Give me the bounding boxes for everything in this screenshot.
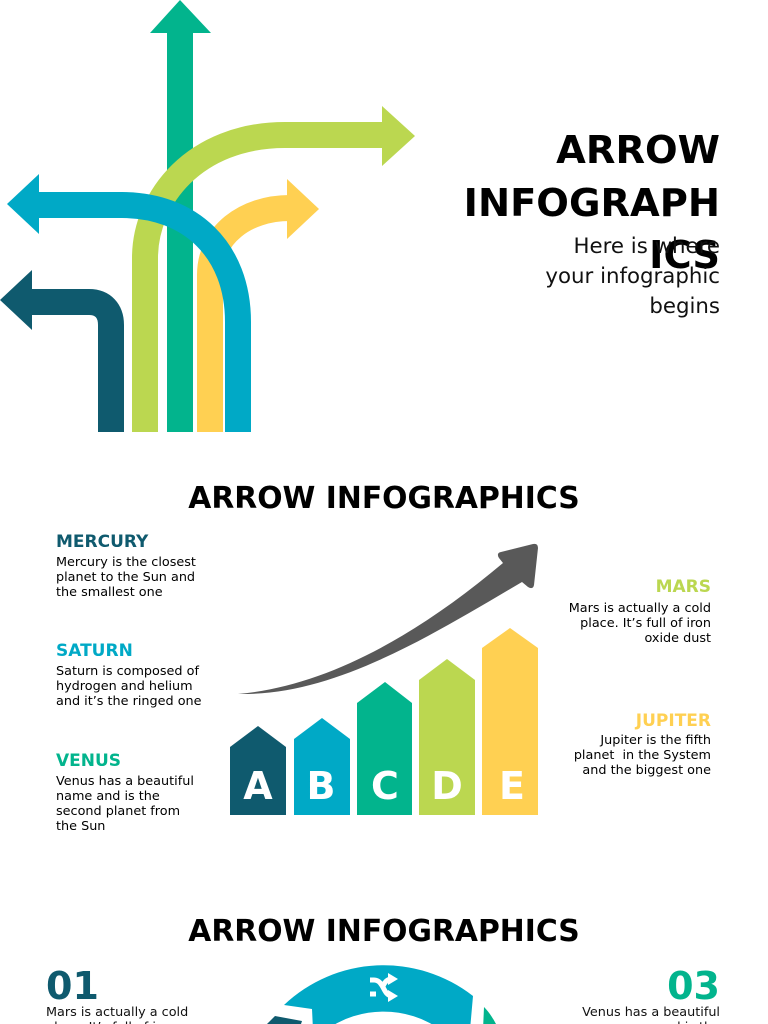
hero arrows illustration <box>0 0 415 432</box>
bar C <box>357 682 412 815</box>
hero title: INFOGRAPH <box>464 181 720 226</box>
text block: Jupiter: JUPITER <box>636 711 711 731</box>
bar chart with growth arrow <box>230 544 538 815</box>
text block: Saturn: hydrogen and helium <box>56 679 193 694</box>
hero title: ARROW <box>556 128 720 173</box>
section heading: cycle: ARROW INFOGRAPHICS <box>188 914 580 949</box>
text block: Mars: place. It’s full of iron <box>580 616 711 631</box>
item 01 <box>46 964 188 1024</box>
text block: Mars: Mars is actually a cold <box>569 601 711 616</box>
bar D: D <box>431 764 463 808</box>
text block: Venus: second planet from <box>56 804 180 819</box>
text block: Jupiter: planet in the System <box>574 748 711 763</box>
text block: Venus <box>56 751 194 834</box>
bar E <box>482 628 538 815</box>
hero subtitle <box>545 234 720 319</box>
hero subtitle: begins <box>649 294 720 319</box>
growth arrow <box>238 544 538 694</box>
text block: Mercury: Mercury is the closest <box>56 555 196 570</box>
hero subtitle: your infographic <box>545 264 720 289</box>
arrow: dark teal left <box>0 270 111 432</box>
section heading: bar chart: ARROW INFOGRAPHICS <box>188 481 580 516</box>
text block: Mercury: MERCURY <box>56 532 148 552</box>
bar A: A <box>243 764 273 808</box>
text block: Saturn: SATURN <box>56 641 133 661</box>
hero title: ICS <box>649 233 720 278</box>
text block: Jupiter <box>574 711 711 778</box>
text block: Venus: Venus has a beautiful <box>56 774 194 789</box>
item 03: Venus has a beautiful <box>582 1005 720 1020</box>
hero title <box>464 128 720 278</box>
item 03: 03 <box>667 964 720 1008</box>
text block: Venus: VENUS <box>56 751 121 771</box>
text block: Venus: name and is the <box>56 789 160 804</box>
text block: Jupiter: Jupiter is the fifth <box>600 733 711 748</box>
hero subtitle: Here is where <box>574 234 720 259</box>
bar C: C <box>371 764 399 808</box>
text block: Mars: oxide dust <box>644 631 711 646</box>
icon: shuffle <box>370 973 398 1002</box>
text block: Saturn: Saturn is composed of <box>56 664 199 679</box>
text block: Jupiter: and the biggest one <box>582 763 711 778</box>
item 03 <box>582 964 720 1024</box>
cycle diagram <box>267 965 496 1024</box>
bar E: E <box>499 764 525 808</box>
segment: green <box>483 1007 499 1024</box>
bar B <box>294 718 350 815</box>
bar A <box>230 726 286 815</box>
bar D <box>419 659 475 815</box>
text block: Mars <box>569 577 711 646</box>
text block: Mercury: planet to the Sun and <box>56 570 195 585</box>
text block: Saturn: and it’s the ringed one <box>56 694 202 709</box>
arrow: cyan left <box>7 174 238 432</box>
text block: Venus: the Sun <box>56 819 105 834</box>
arrow: green up <box>150 0 211 432</box>
arrow: lime right <box>145 106 415 432</box>
segment: cyan <box>284 965 473 1024</box>
segment: dark teal <box>263 1016 302 1024</box>
bar B: B <box>307 764 335 808</box>
item 01: Mars is actually a cold <box>46 1005 188 1020</box>
text block: Saturn <box>56 641 202 709</box>
item 01: 01 <box>46 964 99 1008</box>
arrow: yellow right <box>210 179 319 432</box>
text block: Mars: MARS <box>656 577 711 597</box>
text block: Mercury <box>56 532 196 600</box>
text block: Mercury: the smallest one <box>56 585 163 600</box>
